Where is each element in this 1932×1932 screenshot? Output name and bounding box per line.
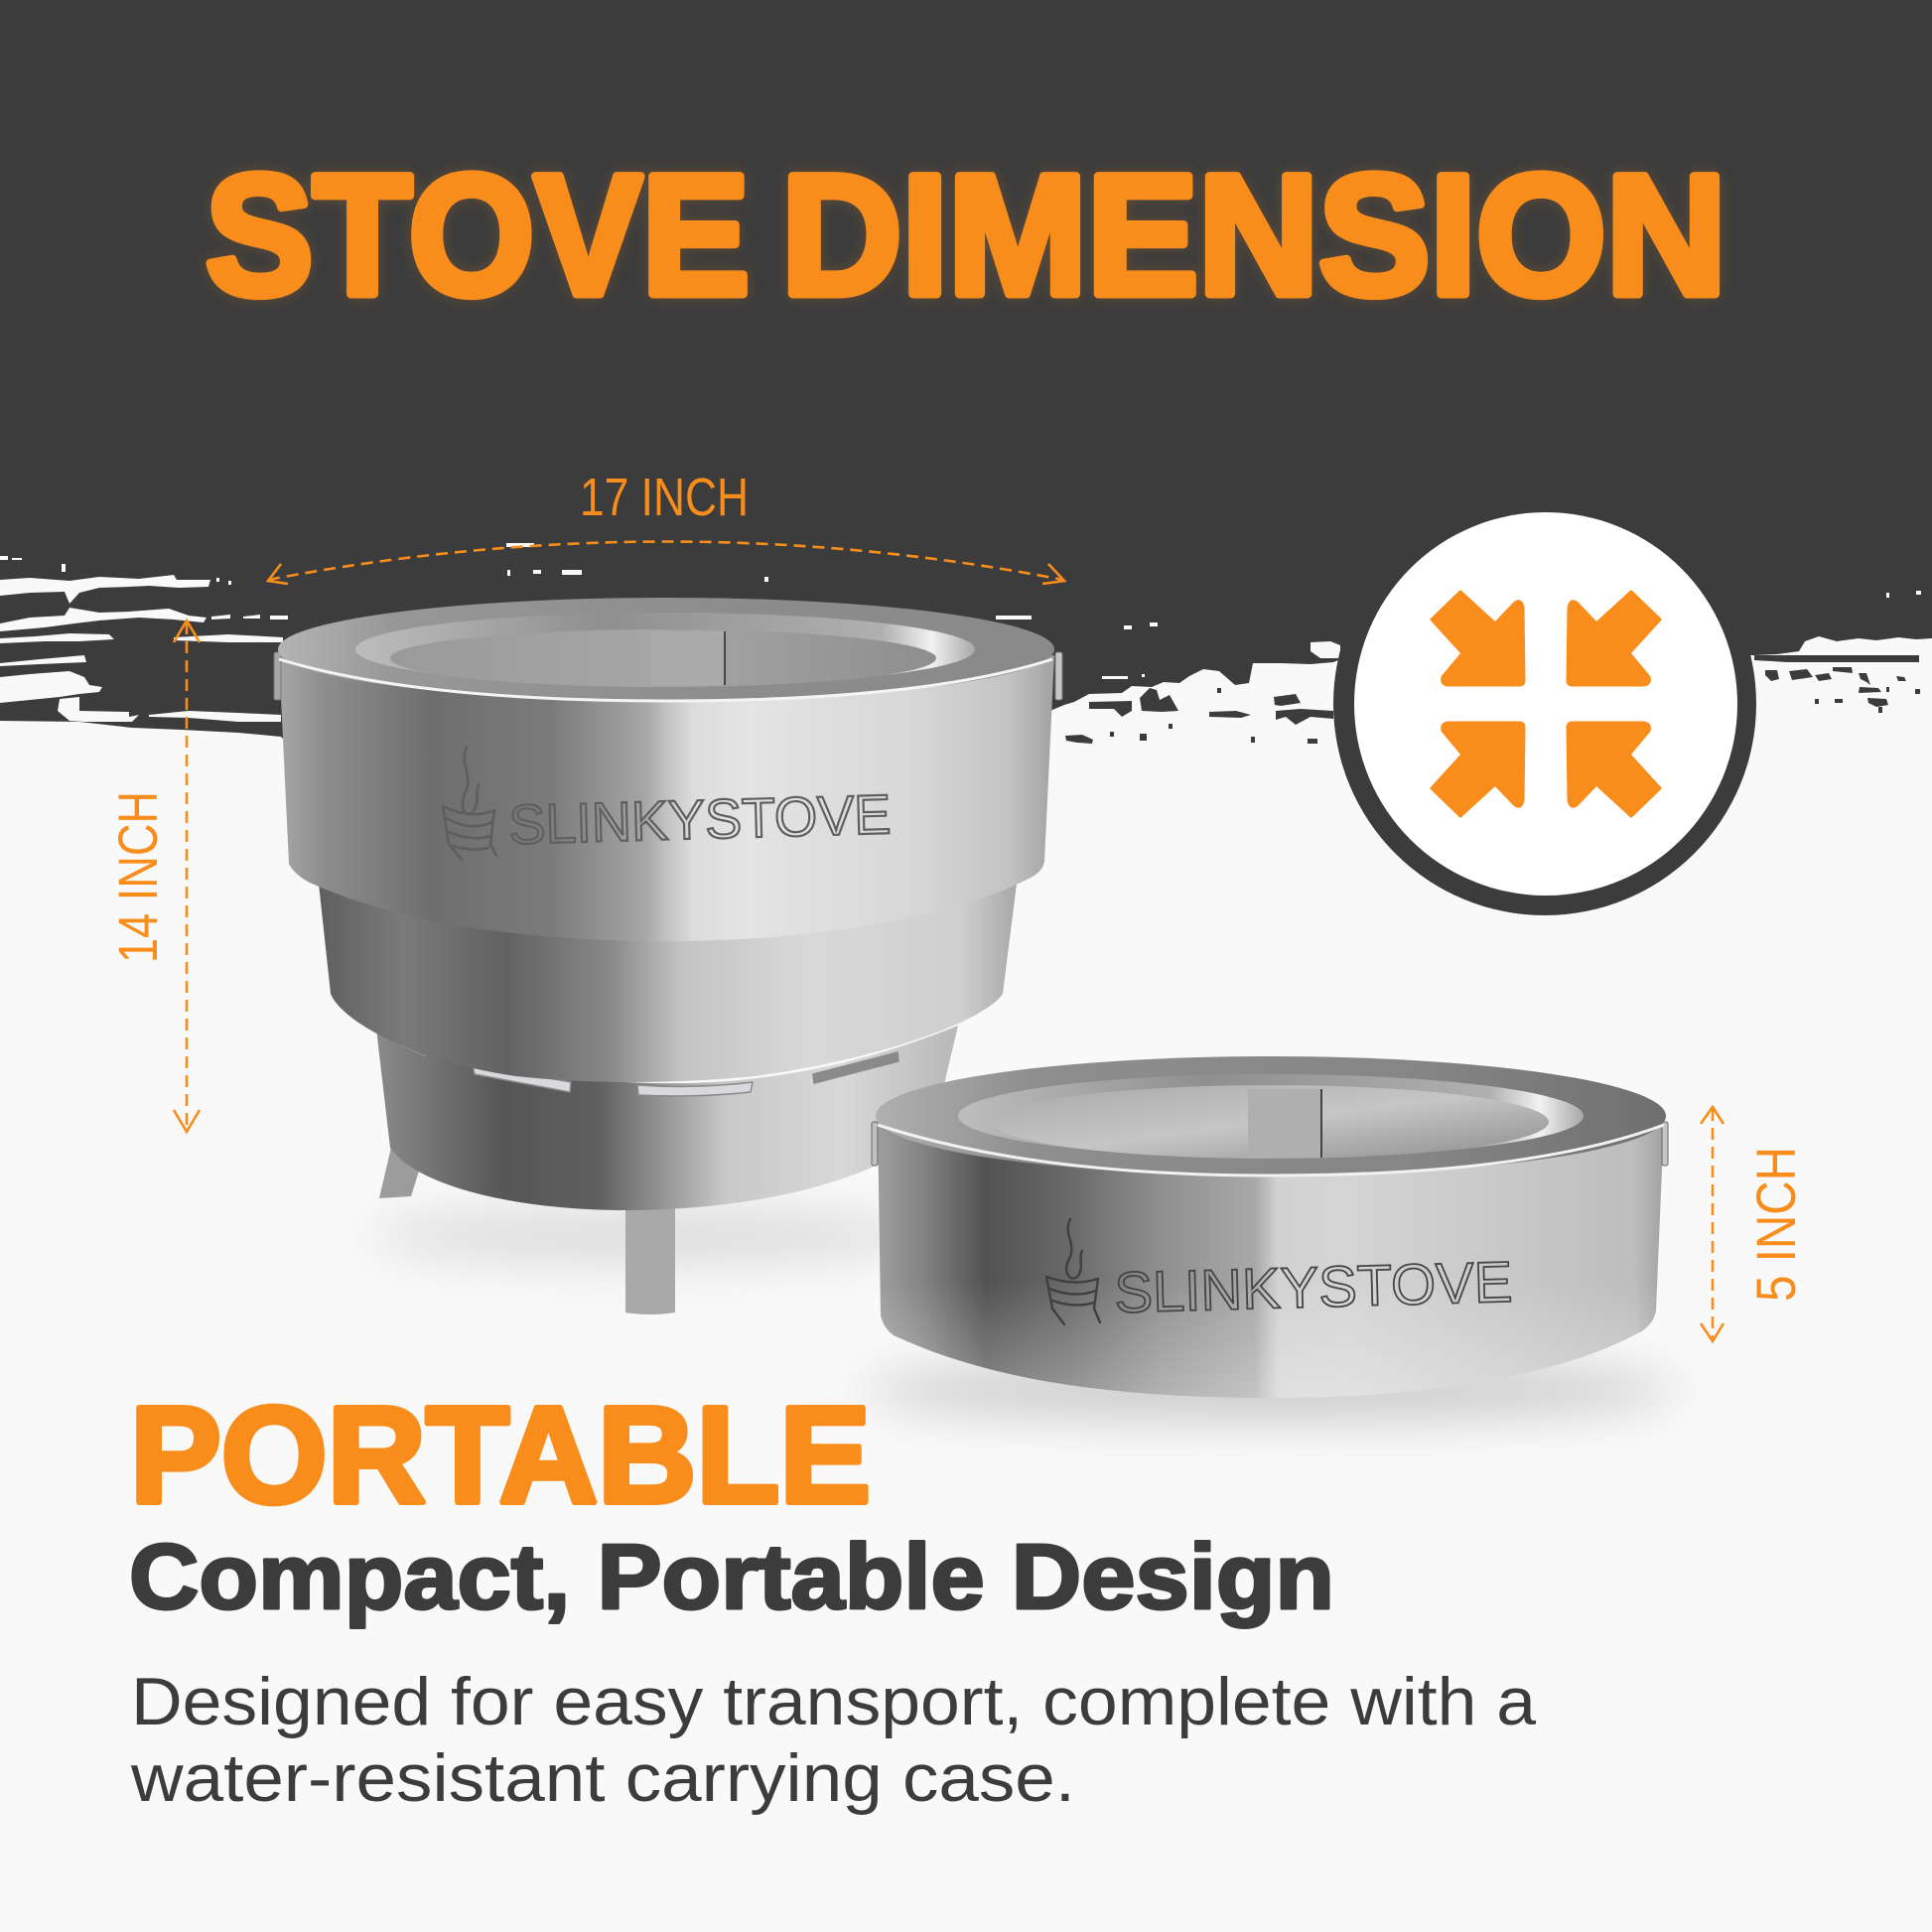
stove leg, front — [625, 1191, 675, 1314]
stove middle section — [319, 884, 1017, 1082]
logo: SLINKYSTOVE: SLINKYSTOVE — [508, 782, 892, 856]
body text: Designed for easy transport, complete with a — [131, 1664, 1536, 1739]
ring shadow — [864, 1360, 1678, 1420]
title: STOVE — [206, 140, 750, 331]
stove rim highlight — [279, 659, 1052, 701]
title: DIMENSION — [781, 140, 1726, 331]
stove shadow — [367, 1208, 923, 1264]
title: DIMENSION — [781, 140, 1726, 331]
body text: water-resistant carrying case. — [130, 1740, 1075, 1816]
body text — [130, 1664, 1536, 1816]
logo: stove flame mark — [443, 747, 496, 860]
dimension label: 14 inch: 14 INCH — [106, 791, 169, 963]
ring lower reflection — [881, 1281, 1657, 1398]
heading: PORTABLE: PORTABLE — [130, 1379, 871, 1532]
dimension label: 5 inch: 5 INCH — [1744, 1147, 1807, 1302]
panel: dark brush-edged header band — [0, 0, 1932, 755]
subheading: Compact, Portable Design — [129, 1525, 1334, 1628]
stove upper rim wall — [279, 655, 1054, 941]
logo: ring flame mark — [1046, 1219, 1100, 1324]
title — [206, 140, 1726, 331]
arrow: 5 inch height — [1701, 1107, 1724, 1341]
icon: compact arrows circle — [1333, 492, 1756, 915]
stove clips — [274, 652, 281, 700]
ring outer wall — [878, 1122, 1664, 1398]
logo: ring SLINKYSTOVE: SLINKYSTOVE — [1114, 1250, 1513, 1325]
arrow: 14 inch height — [174, 621, 200, 1132]
stove lower vented section — [376, 1026, 958, 1210]
stove leg, rear — [379, 1139, 421, 1198]
icon: four inward orange arrows — [1432, 592, 1660, 816]
ring inner bevel — [958, 1074, 1584, 1158]
stove opening — [390, 629, 936, 687]
ring opening — [993, 1085, 1549, 1159]
stove inner bevel — [355, 613, 975, 686]
stove: assembled tall stove — [274, 598, 1062, 1314]
ring highlight — [878, 1125, 1664, 1175]
white brush streaks, left — [0, 543, 1921, 722]
dark brush specks, right of stove — [1065, 655, 1920, 744]
title: STOVE — [206, 140, 750, 331]
dimension label: 17 inch: 17 INCH — [580, 468, 749, 527]
ring clips — [872, 1122, 878, 1166]
stove top rim — [278, 598, 1054, 701]
stove vent slots — [397, 1035, 898, 1096]
ring top — [876, 1056, 1666, 1175]
arrow: 17 inch width — [268, 542, 1064, 584]
stove: separate ring section — [872, 1056, 1668, 1398]
